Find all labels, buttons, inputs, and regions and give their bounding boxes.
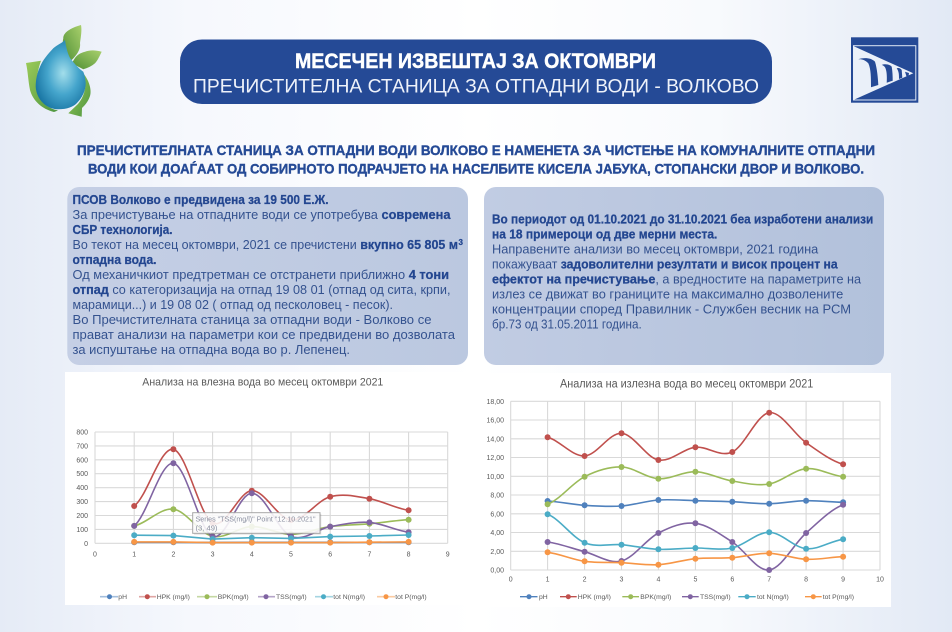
legend: effluent: tot P(mg/l) [823,594,854,601]
intro statement: ПРЕЧИСТИТЕЛНАТА СТАНИЦА ЗА ОТПАДНИ ВОДИ ВОЛКОВО Е НАМЕНЕТА ЗА ЧИСТЕЊЕ НА КОМУНАЛНИТЕ ОТПАДНИ [77,142,875,158]
x axis labels: 4 [250,552,254,559]
y axis labels: 500 [76,471,88,478]
x axis labels: 7 [767,577,771,584]
y axis labels: 14,00 [486,436,504,443]
y axis labels: 0,00 [490,568,504,574]
legend: influent: pH [118,594,127,601]
panel: analysis results: покажуваат задоволителни резултати и висок процент на [492,256,838,271]
panel: plant capacity and treatment: ПСОВ Волково е предвидена за 19 500 Е.Ж. [72,192,328,207]
legend: effluent: TSS(mg/l) [700,594,731,601]
panel: plant capacity and treatment: марамици...) и 19 08 02 ( отпад од песколовец - песок). [72,297,393,312]
panel: plant capacity and treatment [67,187,468,365]
y axis labels: 0 [84,541,88,548]
icon: company logo [851,37,918,103]
x axis labels: 8 [407,552,411,559]
x axis labels: 0 [509,577,513,584]
legend: influent: tot P(mg/l) [395,594,427,601]
panel: analysis results: излез се движат во границите на максимално дозволените [492,286,843,301]
legend: effluent: tot N(mg/l) [757,594,789,601]
panel: plant capacity and treatment: За пречистување на отпадните води се употребува современа [72,207,451,222]
panel: plant capacity and treatment: прават анализи на параметри кои се предвидени во дозволата [72,327,456,342]
x axis labels: 3 [620,577,624,584]
x axis labels: 4 [656,577,660,584]
x axis labels: 6 [328,552,332,559]
x axis labels [93,552,450,559]
y axis labels: 700 [76,443,88,450]
panel: analysis results: на 18 примероци од две мерни места. [492,226,717,241]
panel: analysis results [484,187,884,365]
chart: effluent water analysis [485,373,891,607]
x axis labels [509,577,884,584]
panel: plant capacity and treatment: отпадна вода. [72,252,156,267]
panel: analysis results: концентрации според Правилник - Службен весник на РСМ [492,301,851,316]
chart title: effluent: Анализа на излезна вода во месец октомври 2021 [560,379,813,391]
x axis labels: 7 [367,552,371,559]
x axis labels: 0 [93,552,97,559]
x axis labels: 2 [171,552,175,559]
y axis labels: 12,00 [486,455,504,462]
y axis labels: 200 [76,513,88,520]
series lines: influent [134,449,409,543]
legend: influent: tot N(mg/l) [333,594,365,601]
panel: plant capacity and treatment: СБР технологија. [72,222,172,237]
x axis labels: 5 [289,552,293,559]
intro statement: ВОДИ КОИ ДОАЃААТ ОД СОБИРНОТО ПОДРАЧЈЕТО НА НАСЕЛБИТЕ КИСЕЛА ЈАБУКА, СТОПАНСКИ ДВОР И ВОЛКОВО. [88,160,864,176]
icon: water drop with leaves and recycling arrows [26,25,102,117]
y axis labels: 4,00 [490,530,504,537]
panel: analysis results: ефектот на пречистување, а вредностите на параметрите на [492,271,862,286]
legend: effluent: pH [539,594,548,601]
panel: analysis results: Направените анализи во месец октомври, 2021 година [492,241,819,256]
panel: plant capacity and treatment: 3 [458,238,464,247]
y axis labels: 300 [76,499,88,506]
legend: influent: BPK(mg/l) [218,594,249,601]
y axis labels: 6,00 [490,511,504,518]
panel: plant capacity and treatment: отпад со категоризација на отпад 19 08 01 (отпад од сита, крпи, [72,282,450,297]
panel: analysis results: бр.73 од 31.05.2011 година. [492,316,642,331]
panel: plant capacity and treatment: за испуштање на отпадна вода во р. Лепенец. [72,342,350,357]
y axis labels: 18,00 [486,399,504,406]
y axis labels: 400 [76,485,88,492]
intro statement [77,142,875,176]
x axis labels: 3 [211,552,215,559]
panel: analysis results: Во периодот од 01.10.2021 до 31.10.2021 беа изработени анализи [492,211,873,226]
y axis labels: 8,00 [490,492,504,500]
y axis labels [486,399,504,574]
y axis labels: 600 [76,457,88,464]
heading: plant name: ПРЕЧИСТИТЕЛНА СТАНИЦА ЗА ОТПАДНИ ВОДИ - ВОЛКОВО [193,76,759,98]
x axis labels: 9 [841,577,845,584]
chart title: influent: Анализа на влезна вода во месец октомври 2021 [142,377,383,389]
chart: influent water analysis [65,372,471,605]
tooltip: (3, 49) [196,524,218,532]
y axis labels: 16,00 [486,418,504,424]
header banner [180,40,772,104]
series lines: effluent [548,413,843,570]
panel: plant capacity and treatment: Во текот на месец октомври, 2021 се пречистени вкупно 65 805 м [72,237,458,252]
x axis labels: 1 [132,552,136,559]
x axis labels: 6 [730,577,734,584]
panel: plant capacity and treatment: Во Пречистителната станица за отпадни води - Волково се [72,312,432,327]
y axis labels: 2,00 [490,549,504,556]
y axis labels: 800 [76,430,88,436]
panel: plant capacity and treatment: Од механичкиот предтретман се отстранети приближно 4 тони [72,267,449,282]
x axis labels: 10 [876,577,884,584]
y axis labels [76,430,88,548]
x axis labels: 9 [446,552,450,559]
x axis labels: 2 [583,577,587,584]
legend: influent [100,594,427,601]
legend: effluent: BPK(mg/l) [640,594,671,601]
legend: effluent: HPK (mg/l) [578,594,611,601]
x axis labels: 8 [804,577,808,584]
y axis labels: 100 [76,527,88,534]
y axis labels: 10,00 [486,474,504,481]
x axis labels: 1 [546,577,550,584]
legend: influent: HPK (mg/l) [157,594,190,601]
legend: effluent [520,594,854,601]
tooltip: Series "TSS(mg/l)" Point "12.10.2021" [196,514,316,524]
legend: influent: TSS(mg/l) [276,594,307,601]
heading: report title: МЕСЕЧЕН ИЗВЕШТАЈ ЗА ОКТОМВРИ [295,50,656,73]
tooltip [193,513,321,535]
x axis labels: 5 [693,577,697,584]
